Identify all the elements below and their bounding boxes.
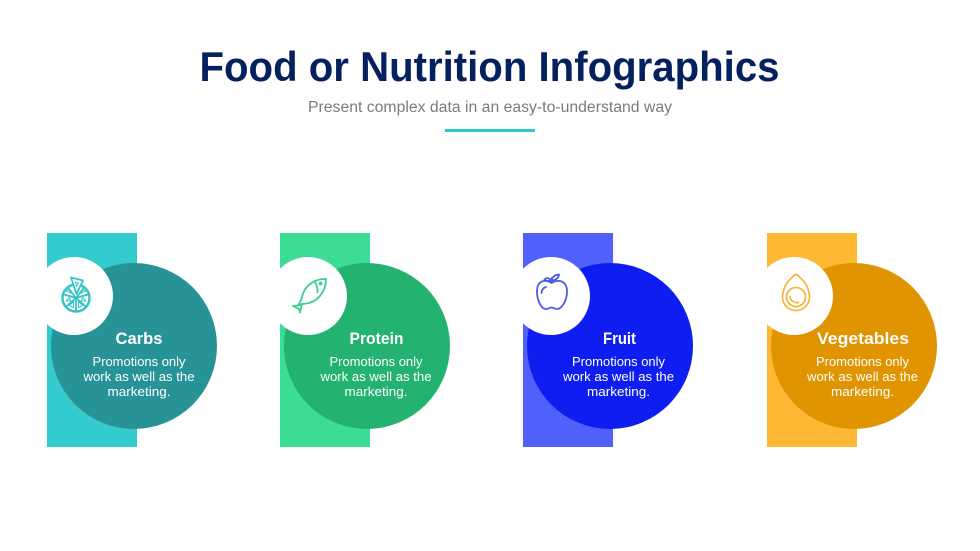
carbs icon badge — [35, 257, 113, 335]
protein main circle — [284, 263, 450, 429]
carbs text: work as well as the — [82, 370, 194, 384]
vegetables main circle — [771, 263, 937, 429]
vegetables text: marketing. — [831, 385, 894, 399]
fruit text — [562, 355, 674, 399]
subtitle: Present complex data in an easy-to-understand way — [308, 99, 672, 116]
carbs text — [82, 355, 194, 399]
vegetables text: Promotions only — [816, 355, 910, 369]
panel: protein — [269, 233, 450, 447]
vegetables text — [806, 355, 918, 399]
panel: vegetables — [755, 233, 937, 447]
vegetables text: work as well as the — [806, 370, 918, 384]
fruit text: work as well as the — [562, 370, 674, 384]
icon: pizza — [62, 278, 90, 312]
carbs heading: Carbs — [116, 330, 162, 348]
panel: fruit — [512, 233, 693, 447]
carbs back rectangle — [47, 233, 137, 447]
icon: avocado — [782, 274, 810, 310]
fruit text: Promotions only — [572, 355, 666, 369]
protein text: marketing. — [344, 385, 408, 399]
protein text: work as well as the — [319, 370, 432, 384]
protein back rectangle — [280, 233, 370, 447]
vegetables back rectangle — [767, 233, 857, 447]
protein text: Promotions only — [330, 355, 423, 369]
title underline — [445, 129, 535, 132]
vegetables heading: Vegetables — [817, 330, 909, 348]
fruit heading: Fruit — [603, 330, 636, 348]
fruit text: marketing. — [587, 385, 650, 399]
vegetables icon badge — [755, 257, 833, 335]
fruit back rectangle — [523, 233, 613, 447]
protein text — [319, 355, 432, 399]
carbs text: Promotions only — [92, 355, 186, 369]
panel: carbs — [35, 233, 217, 447]
protein icon badge — [269, 257, 347, 335]
protein heading: Protein — [350, 330, 404, 348]
icon: fish — [293, 279, 326, 312]
carbs main circle — [51, 263, 217, 429]
carbs text: marketing. — [108, 385, 170, 399]
icon: apple — [537, 274, 567, 309]
title: Food or Nutrition Infographics — [200, 43, 780, 90]
fruit main circle — [527, 263, 693, 429]
fruit icon badge — [512, 257, 590, 335]
